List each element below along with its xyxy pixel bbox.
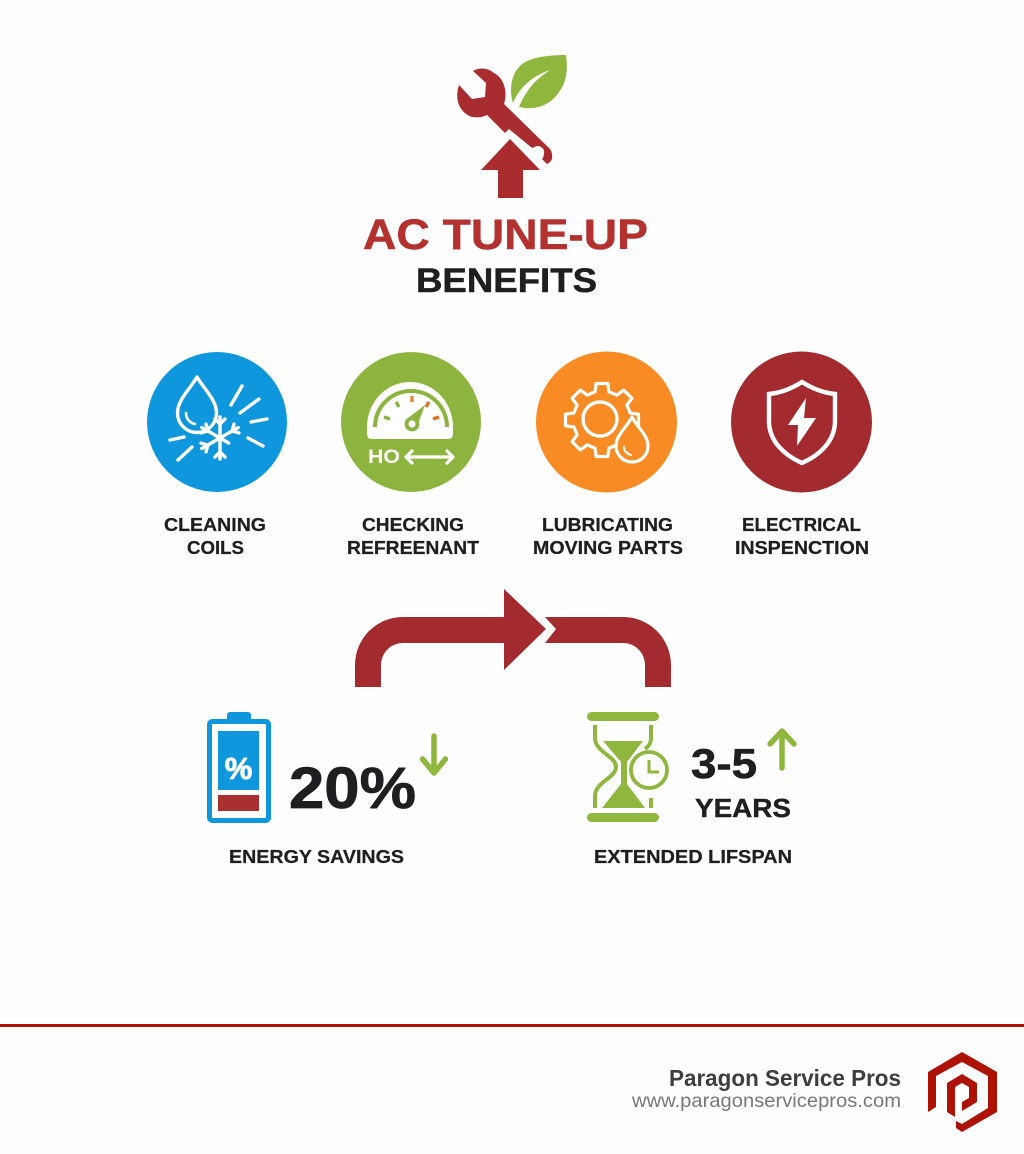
stat: 3-5 years: YEARS	[695, 793, 791, 823]
icon: green circle with gauge: HO	[368, 447, 400, 468]
panel: electrical inspection	[731, 352, 872, 558]
panel: cleaning coils	[147, 352, 287, 558]
label: lubricating moving parts: MOVING PARTS	[533, 537, 683, 558]
label: cleaning coils: COILS	[187, 537, 244, 558]
panel: lubricating moving parts	[533, 352, 683, 558]
icon: up arrow	[481, 139, 540, 198]
label: electrical inspection: INSPENCTION	[735, 537, 869, 558]
stat: 3-5 years	[691, 740, 791, 823]
label: extended lifspan: EXTENDED LIFSPAN	[594, 847, 792, 867]
icon: down arrow	[422, 736, 446, 773]
label: electrical inspection: ELECTRICAL	[742, 514, 861, 535]
arrow: curved flow connector	[355, 589, 671, 687]
icon: orange circle with gear and oil drop	[536, 352, 677, 492]
icon: wrench	[457, 69, 552, 164]
label: checking refreenant: CHECKING	[362, 514, 464, 535]
label: cleaning coils	[164, 514, 266, 558]
footer: brand	[631, 1052, 997, 1132]
icon: company logo	[928, 1052, 997, 1132]
icon: leaf	[511, 55, 567, 108]
footer rule	[0, 1024, 1024, 1027]
heading: Benefits: BENEFITS	[416, 262, 597, 300]
panel: extended lifespan	[587, 712, 794, 867]
icon: red circle with shield and bolt	[731, 352, 872, 492]
label: checking refreenant	[347, 514, 480, 558]
stat: 3-5 years: 3-5	[691, 740, 757, 787]
icon: blue circle with drop and snowflake	[147, 352, 287, 492]
label: checking refreenant: REFREENANT	[347, 537, 480, 558]
title	[363, 211, 648, 300]
text: company name and website	[631, 1065, 901, 1112]
label: energy savings: ENERGY SAVINGS	[229, 847, 404, 867]
icon: up arrow	[770, 731, 794, 768]
logo icon: wrench, leaf and up arrow	[457, 55, 567, 198]
text: company name and website: www.paragonservicepros.com	[631, 1090, 901, 1112]
panel: checking refrigerant	[341, 352, 481, 558]
stat: 20%: 20%	[289, 756, 416, 821]
label: electrical inspection	[735, 514, 869, 558]
label: lubricating moving parts	[533, 514, 683, 558]
label: lubricating moving parts: LUBRICATING	[542, 514, 673, 535]
panel: energy savings	[210, 712, 446, 867]
icon: green circle with gauge	[341, 352, 481, 492]
icon: hourglass with clock	[587, 712, 667, 822]
label: cleaning coils: CLEANING	[164, 514, 266, 535]
heading: AC Tune-Up: AC TUNE-UP	[363, 211, 648, 259]
icon: battery: %	[225, 751, 252, 786]
text: company name and website: Paragon Service Pros	[669, 1065, 901, 1091]
icon: battery	[210, 712, 268, 820]
